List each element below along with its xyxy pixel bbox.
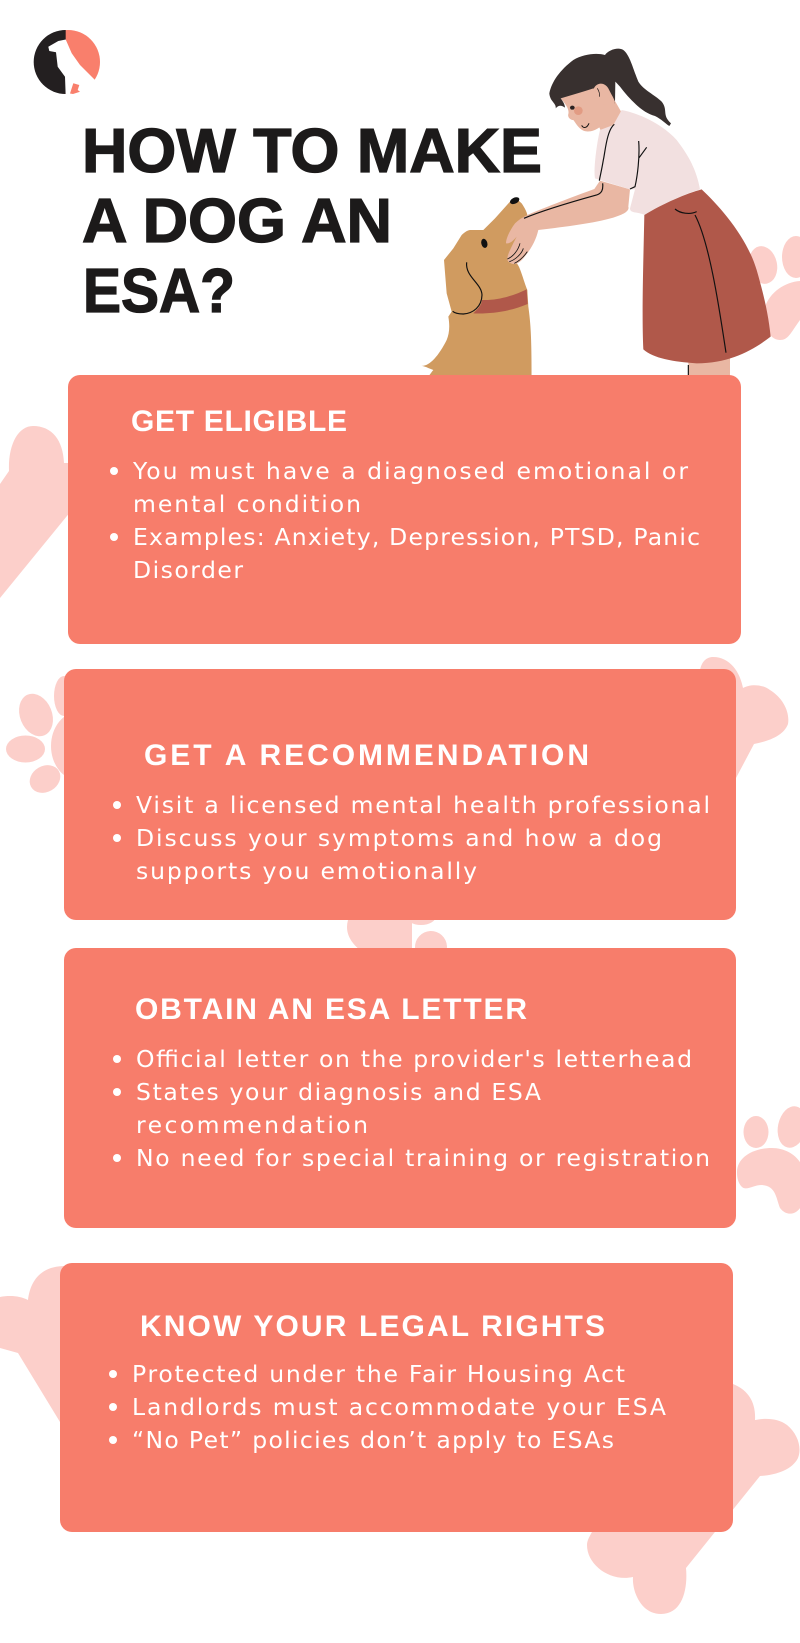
bullet list: recommendation: Visit a licensed mental health professional xyxy=(136,791,710,819)
dog xyxy=(420,196,532,378)
bone: left of fourth panel xyxy=(0,1266,70,1440)
heading: know your legal rights: KNOW YOUR LEGAL RIGHTS xyxy=(140,1310,605,1343)
bullet list: rights: Landlords must accommodate your ESA xyxy=(132,1393,666,1421)
paw: left of second panel xyxy=(6,676,105,798)
head and hair xyxy=(549,49,671,137)
bone: bottom right of fourth panel xyxy=(587,1384,800,1614)
panel: get a recommendation xyxy=(64,669,736,920)
heading: get a recommendation: GET A RECOMMENDATION xyxy=(144,739,589,772)
bone: left of first panel xyxy=(0,426,80,598)
bullet list: recommendation: Discuss your symptoms and how a dog xyxy=(136,824,662,852)
bullet list: recommendation xyxy=(113,791,710,885)
paw: between second and third panels xyxy=(347,907,452,968)
bullet list: letter: recommendation xyxy=(136,1111,368,1139)
title xyxy=(82,117,542,326)
bullet list: letter: States your diagnosis and ESA xyxy=(136,1078,541,1106)
bullet list: letter: Official letter on the provider's letterhead xyxy=(136,1045,692,1073)
panel: get eligible xyxy=(68,375,741,644)
bone: right of second panel xyxy=(700,657,788,778)
bullet list: recommendation: supports you emotionally xyxy=(136,857,477,885)
paw: right of third panel xyxy=(737,1104,800,1214)
illustration: woman petting dog xyxy=(420,49,771,378)
bullet list: letter: No need for special training or registration xyxy=(136,1144,710,1172)
bullet list: eligibility: Examples: Anxiety, Depression, PTSD, Panic xyxy=(133,523,700,551)
bullet list: eligibility xyxy=(110,457,700,584)
panel: obtain an esa letter xyxy=(64,948,736,1228)
panel: know your legal rights xyxy=(60,1263,733,1532)
icon: round dog logo xyxy=(34,30,102,96)
bullet list: eligibility: mental condition xyxy=(133,490,361,518)
bullet list: eligibility: You must have a diagnosed emotional or xyxy=(132,457,688,485)
heading: obtain an esa letter: OBTAIN AN ESA LETTER xyxy=(135,993,527,1026)
title: ESA? xyxy=(83,257,235,326)
title: A DOG AN xyxy=(82,187,392,256)
bullet list: rights: “No Pet” policies don’t apply to ESAs xyxy=(132,1426,614,1454)
paw: beside skirt xyxy=(745,236,800,340)
woman xyxy=(506,49,771,377)
bullet list: rights: Protected under the Fair Housing Act xyxy=(132,1360,625,1388)
bullet list: eligibility: Disorder xyxy=(133,556,243,584)
title: HOW TO MAKE xyxy=(82,117,542,186)
bullet list: letter xyxy=(113,1045,710,1172)
bullet list: rights xyxy=(109,1360,666,1454)
heading: get eligible: GET ELIGIBLE xyxy=(131,405,347,438)
